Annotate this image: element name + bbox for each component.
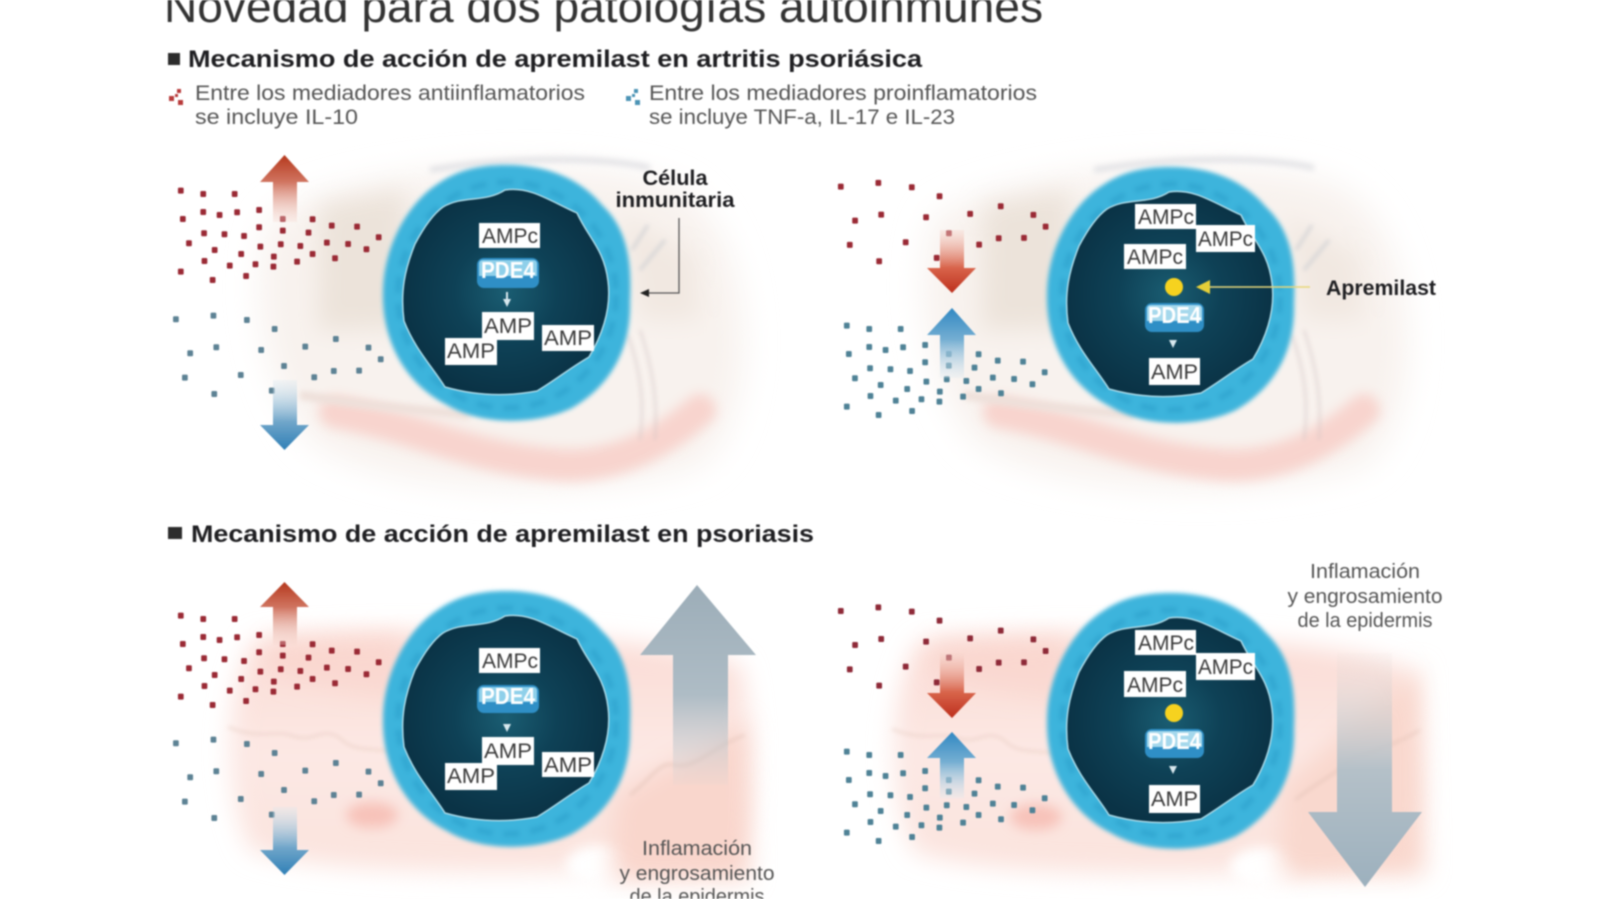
- immune cell: [383, 591, 630, 847]
- label PDE4: PDE4: [481, 257, 535, 283]
- legend: antiinflamatorios: se incluye IL-10: [195, 106, 358, 129]
- label AMP: AMP: [544, 327, 592, 350]
- label AMP: AMP: [1151, 788, 1198, 811]
- arrow PDE4 to AMP: [503, 292, 511, 307]
- panel heading: psoriasis: Mecanismo de acción de apremilast en psoriasis: [191, 521, 814, 548]
- joint illustration: [924, 160, 1407, 487]
- label: inflamación: y engrosamiento: [620, 863, 774, 885]
- label PDE4: PDE4: [1148, 728, 1201, 754]
- label AMP: AMP: [447, 765, 495, 788]
- arrow: anti-inflammatory down: [927, 653, 976, 718]
- label: inflamación: y engrosamiento: [1288, 586, 1442, 608]
- panel: psoriasis con apremilast: [838, 561, 1442, 887]
- arrow: apremilast: [1196, 280, 1310, 294]
- skin illustration: [892, 634, 1415, 887]
- label AMP: AMP: [484, 315, 532, 338]
- label: célula inmunitaria: Célula: [642, 167, 708, 190]
- label AMPc: AMPc: [1198, 228, 1253, 251]
- legend: antiinflamatorios: [169, 82, 585, 129]
- joint illustration: [260, 160, 743, 487]
- arrow: pro-inflammatory down: [260, 807, 309, 875]
- legend: proinflamatorios: Entre los mediadores proinflamatorios: [649, 82, 1037, 105]
- epidermis column: [1280, 665, 1425, 875]
- label AMPc: AMPc: [1138, 206, 1194, 229]
- arrow: pro-inflammatory up: [927, 308, 976, 378]
- blue mediator dots: [844, 749, 1048, 844]
- arrow PDE4 to AMP: [1169, 340, 1177, 348]
- arrow PDE4 to AMP: [1169, 766, 1177, 774]
- label AMPc: AMPc: [1198, 656, 1253, 679]
- label AMPc: AMPc: [482, 650, 538, 673]
- immune cell: [383, 165, 630, 421]
- label AMP: AMP: [447, 340, 495, 363]
- skin illustration: [228, 632, 751, 885]
- label: inflamación: Inflamación: [1310, 561, 1420, 583]
- label AMPc: AMPc: [1138, 632, 1194, 655]
- big arrow: inflammation down: [1308, 653, 1422, 887]
- blue mediator dots: [173, 313, 384, 397]
- red mediator dots: [178, 613, 382, 708]
- immune cell: [1047, 167, 1294, 423]
- blue mediator dots: [173, 737, 384, 821]
- panel: artritis con apremilast: [838, 160, 1436, 487]
- immune cell: [1047, 593, 1294, 849]
- arrow: pro-inflammatory up: [927, 732, 976, 798]
- label: inflamación: Inflamación: [642, 838, 752, 860]
- legend: proinflamatorios: se incluye TNF-a, IL-17 e IL-23: [649, 106, 955, 129]
- label AMPc: AMPc: [1127, 246, 1183, 269]
- panel: artritis sin apremilast: [173, 155, 743, 487]
- label AMPc: AMPc: [1127, 674, 1183, 697]
- label: célula inmunitaria: [616, 167, 735, 297]
- arrow: anti-inflammatory up: [260, 582, 309, 645]
- label AMPc: AMPc: [482, 225, 538, 248]
- label: inflamación: [620, 838, 774, 899]
- label: inflamación: de la epidermis: [1298, 610, 1432, 632]
- legend: proinflamatorios: [626, 82, 1037, 129]
- panel: psoriasis sin apremilast: [173, 582, 775, 899]
- red mediator dots: [178, 188, 382, 283]
- epidermis column: [612, 720, 750, 880]
- arrow: anti-inflammatory down: [927, 230, 976, 293]
- arrow PDE4 to AMP: [503, 724, 511, 732]
- legend: antiinflamatorios: Entre los mediadores antiinflamatorios: [195, 82, 585, 105]
- big arrow: inflammation up: [640, 585, 756, 785]
- arrow: anti-inflammatory up: [260, 155, 309, 222]
- arrow: pro-inflammatory down: [260, 380, 309, 450]
- epidermis wave: [630, 735, 745, 795]
- panel heading: artritis psoriásica: Mecanismo de acción de apremilast en artritis psoriásica: [188, 46, 923, 73]
- red mediator dots: [838, 180, 1048, 264]
- epidermis wave: [1295, 730, 1420, 800]
- label PDE4: PDE4: [1148, 302, 1201, 328]
- label: apremilast: Apremilast: [1326, 277, 1436, 300]
- label AMP: AMP: [1151, 361, 1198, 384]
- yellow apremilast molecule: [1165, 704, 1183, 722]
- label AMP: AMP: [484, 740, 532, 763]
- label AMP: AMP: [544, 754, 592, 777]
- label PDE4: PDE4: [481, 683, 535, 709]
- yellow apremilast molecule: [1165, 278, 1183, 296]
- blue mediator dots: [844, 323, 1048, 418]
- label: célula inmunitaria: inmunitaria: [616, 189, 735, 212]
- label: inflamación: [1288, 561, 1442, 632]
- red mediator dots: [838, 604, 1048, 689]
